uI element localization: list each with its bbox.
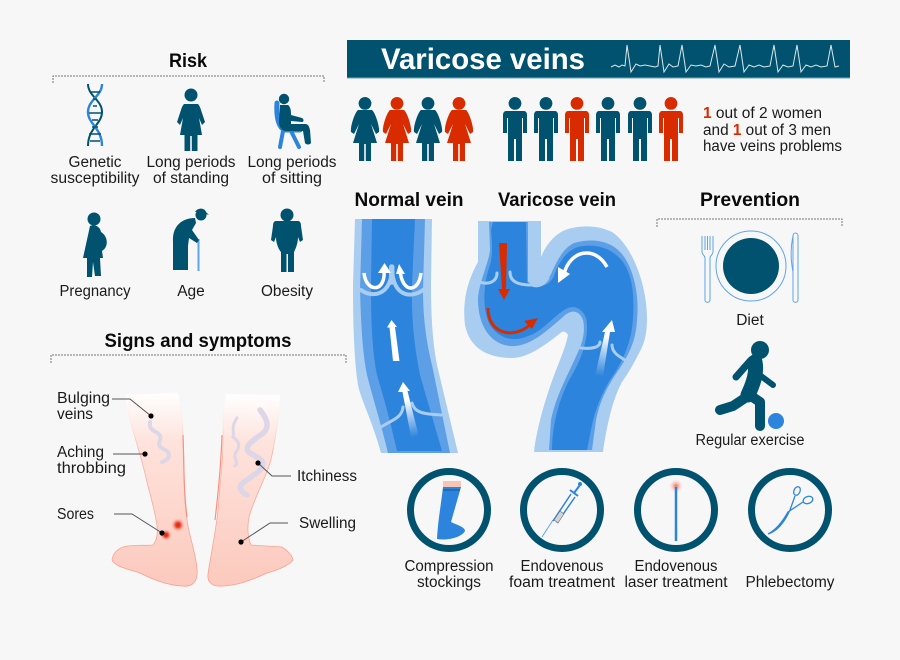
text: Bulging veins: veins xyxy=(57,406,93,423)
man xyxy=(534,97,558,161)
man xyxy=(503,97,527,161)
right leg red edge xyxy=(215,435,222,520)
sore xyxy=(171,518,185,532)
white straight arrow xyxy=(387,320,400,361)
bracket: Prevention xyxy=(657,219,842,227)
icons: women, one of two highlighted xyxy=(351,97,473,161)
icons: men, one of three highlighted xyxy=(503,97,683,161)
sore xyxy=(160,529,172,541)
treatment: laser fibre xyxy=(638,472,714,548)
heading: Risk: Risk xyxy=(169,50,207,72)
woman highlighted xyxy=(383,97,411,161)
text: Regular exercise: Regular exercise xyxy=(696,432,804,449)
text: foam treatment: Endovenous xyxy=(520,558,604,575)
heading: Normal vein: Normal vein xyxy=(354,189,464,211)
heading: Signs and symptoms: Signs and symptoms xyxy=(104,330,292,352)
text: Bulging veins: Bulging xyxy=(57,390,110,407)
text: Aching throbbing: throbbing xyxy=(57,460,126,477)
text: Diet: Diet xyxy=(736,312,764,329)
leader: Itchiness xyxy=(255,460,291,476)
diagram: varicose vein xyxy=(464,221,647,452)
title: Varicose veins xyxy=(381,43,585,76)
icon: obese person xyxy=(271,208,303,272)
text: laser treatment: laser treatment xyxy=(624,574,728,591)
text: Compression stockings: Compression xyxy=(404,558,494,575)
stocking cuff xyxy=(443,489,460,491)
text: Long periods of sitting: of sitting xyxy=(262,170,322,187)
banner xyxy=(347,40,850,78)
text: Genetic susceptibility: susceptibility xyxy=(50,170,140,187)
text: laser treatment: Endovenous xyxy=(634,558,718,575)
woman xyxy=(414,97,442,161)
leader: Aching xyxy=(113,451,148,457)
man highlighted xyxy=(659,97,683,161)
treatment: phlebectomy forceps xyxy=(752,472,828,548)
text: statistic: have veins problems xyxy=(703,138,842,155)
right leg veins xyxy=(233,418,239,466)
text: Aching throbbing: Aching xyxy=(57,444,104,461)
leader: Bulging veins xyxy=(112,399,154,419)
text: foam treatment: foam treatment xyxy=(509,574,616,591)
text: statistic: 1 out of 2 women xyxy=(703,105,822,122)
text: Long periods of standing: of standing xyxy=(153,170,229,187)
left leg xyxy=(112,393,197,586)
text: Sores: Sores xyxy=(57,506,94,523)
valve post xyxy=(389,267,394,282)
red straight arrow xyxy=(498,243,510,300)
text: Age: Age xyxy=(177,283,205,300)
text: Compression stockings: stockings xyxy=(417,574,481,591)
diagram: normal vein xyxy=(353,219,458,453)
treatment: compression stockings xyxy=(410,472,488,548)
treatment: foam syringe xyxy=(524,472,600,548)
white fading arrow xyxy=(595,320,615,376)
icon: person kicking a ball xyxy=(720,341,784,429)
icon: person sitting on chair xyxy=(277,94,311,147)
man xyxy=(628,97,652,161)
text: Long periods of standing: Long periods xyxy=(146,154,236,171)
heading: Varicose vein: Varicose vein xyxy=(498,189,616,211)
white fading arrow xyxy=(398,382,419,437)
man xyxy=(596,97,620,161)
white curved arrows xyxy=(364,263,421,288)
text: Pregnancy: Pregnancy xyxy=(60,283,131,300)
ECG line xyxy=(611,45,839,72)
man highlighted xyxy=(565,97,589,161)
right leg veins xyxy=(240,410,267,495)
valve cusps lower xyxy=(581,342,625,360)
right leg xyxy=(208,394,293,586)
illustration: legs xyxy=(112,393,293,586)
text: Swelling: Swelling xyxy=(299,515,356,532)
text: Obesity: Obesity xyxy=(261,283,313,300)
text: Genetic susceptibility: Genetic xyxy=(68,154,122,171)
icon: elderly person with cane xyxy=(173,209,209,271)
valve cusps left xyxy=(480,273,497,283)
leader: Swelling xyxy=(238,523,288,545)
heading: Prevention: Prevention xyxy=(700,189,800,211)
text: Itchiness: Itchiness xyxy=(297,468,357,485)
white curved arrow xyxy=(558,253,607,283)
leader: Sores xyxy=(114,514,165,536)
icon: pregnant woman xyxy=(83,212,107,277)
valve cusps bottom xyxy=(381,403,441,427)
text: statistic: and 1 out of 3 men xyxy=(703,122,832,139)
woman highlighted xyxy=(445,97,473,161)
icon: DNA helix xyxy=(88,84,102,146)
text: Long periods of sitting: Long periods xyxy=(248,154,337,171)
stocking xyxy=(437,487,465,540)
woman xyxy=(351,97,379,161)
valve cusps middle xyxy=(510,272,548,286)
left leg veins xyxy=(150,422,169,462)
icon: plate with fork and knife xyxy=(702,231,798,302)
icon: standing woman xyxy=(177,88,205,151)
red curved arrow xyxy=(488,308,538,333)
bracket: Risk xyxy=(53,76,324,83)
text: Phlebectomy: Phlebectomy xyxy=(746,574,835,591)
bracket: Signs and symptoms xyxy=(51,355,346,363)
left leg red edge xyxy=(183,435,187,517)
valve cusps top xyxy=(361,270,423,295)
